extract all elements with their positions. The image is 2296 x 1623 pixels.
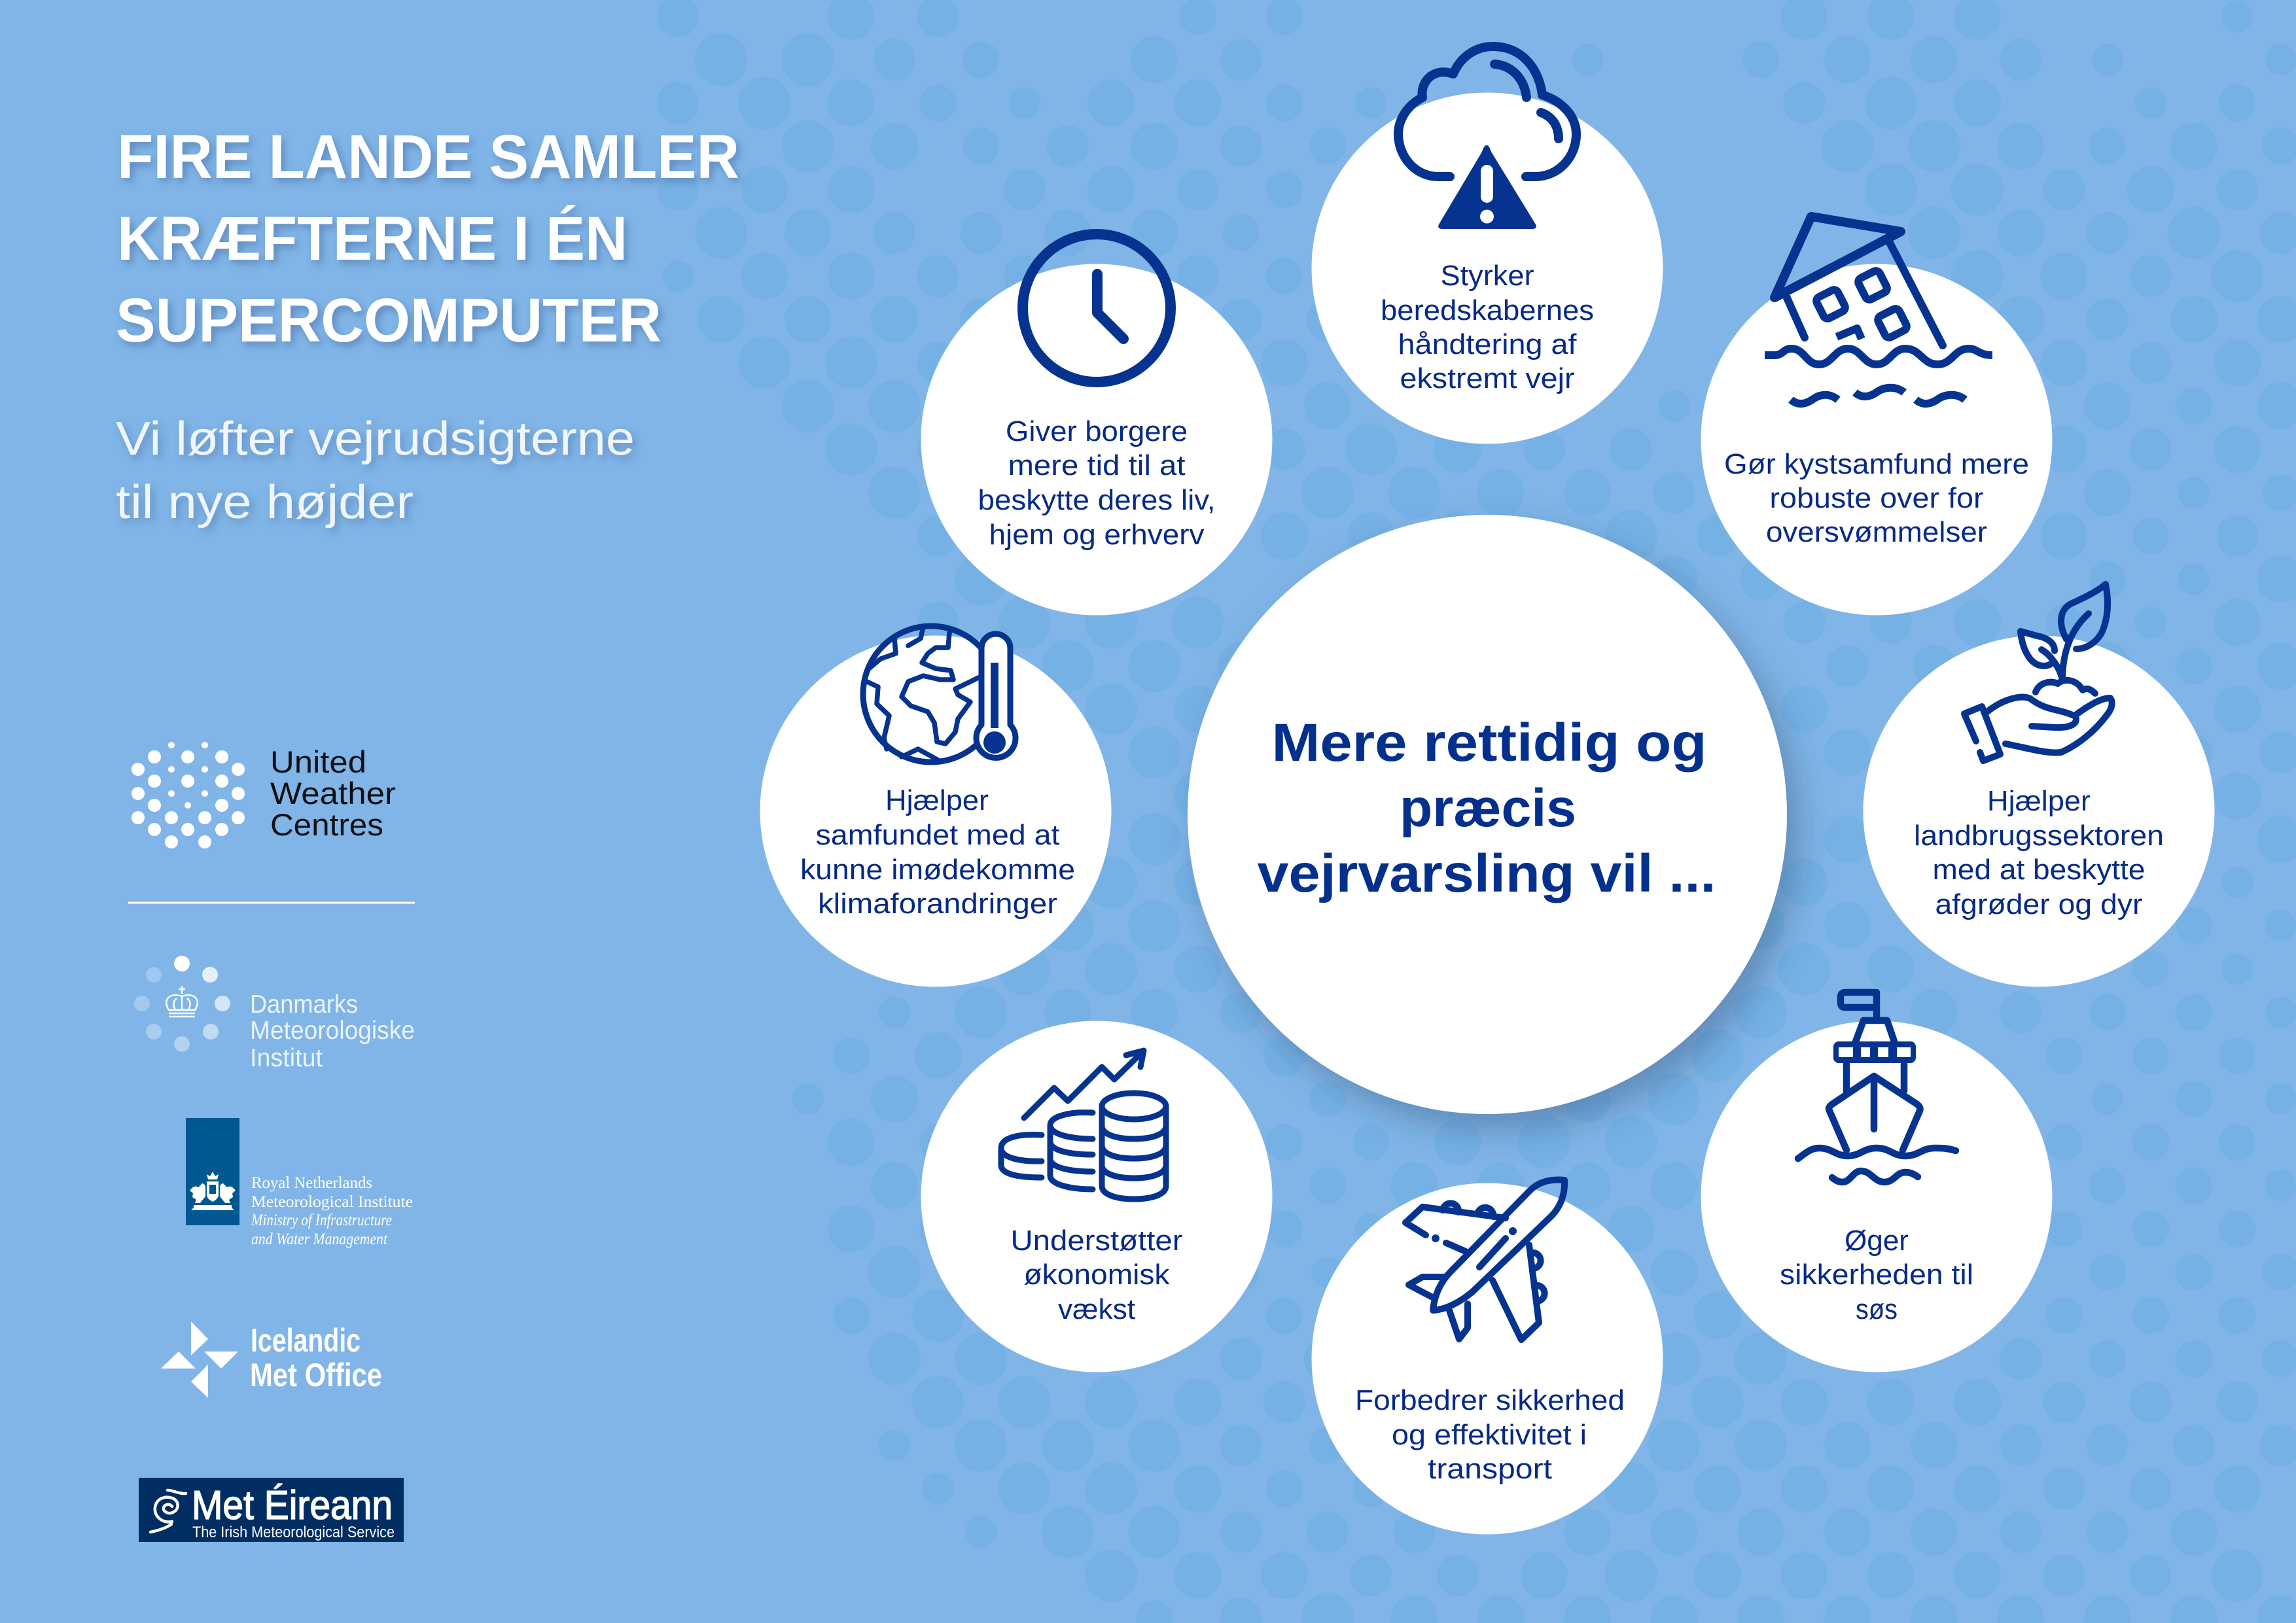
icon: clock: [1023, 234, 1171, 382]
text: ekstremt vejr: [1400, 362, 1574, 394]
text: Styrker: [1441, 260, 1534, 292]
IMO wordmark: [250, 1322, 382, 1393]
KNMI wordmark: Meteorological Institute: [251, 1193, 413, 1211]
Met Éireann wordmark: Met Éireann: [192, 1483, 393, 1528]
text: vækst: [1058, 1293, 1135, 1325]
text: Forbedrer sikkerhed: [1355, 1384, 1625, 1416]
icon: globe with thermometer: [863, 626, 1016, 762]
title: [116, 122, 739, 355]
center heading: præcis: [1400, 778, 1576, 838]
logo: Royal Netherlands Meteorological Institute: [186, 1118, 413, 1248]
DMI wordmark: Institut: [250, 1044, 323, 1072]
text: klimaforandringer: [818, 888, 1057, 920]
text: mere tid til at: [1008, 449, 1186, 481]
text: landbrugssektoren: [1914, 820, 2164, 852]
DMI wordmark: Meteorologiske: [250, 1017, 415, 1045]
panel: economic growth: [921, 1021, 1272, 1372]
panel: safety at sea: [1701, 992, 2052, 1372]
icon: plane window dots: [1432, 1227, 1517, 1242]
text: Giver borgere: [1006, 415, 1188, 447]
icon: house in flood: [1765, 217, 1992, 404]
text: hjem og erhverv: [989, 519, 1204, 551]
text: robuste over for: [1769, 482, 1984, 514]
text: Understøtter: [1010, 1225, 1183, 1257]
text: afgrøder og dyr: [1935, 888, 2142, 920]
icon: airplane: [1405, 1180, 1564, 1340]
panel: extreme weather: [1311, 46, 1663, 444]
icon: UWC dot mark: [132, 742, 245, 848]
text: og effektivitet i: [1392, 1419, 1587, 1451]
icon: DMI dots and crown: [134, 956, 230, 1052]
panel: transport: [1311, 1180, 1663, 1535]
text: [1381, 260, 1594, 394]
text: Hjælper: [885, 784, 989, 816]
KNMI wordmark: Ministry of Infrastructure: [251, 1212, 392, 1229]
text: [800, 784, 1075, 920]
title: FIRE LANDE SAMLER: [117, 122, 739, 192]
center heading: vejrvarsling vil ...: [1258, 844, 1716, 903]
panel: more time for citizens: [921, 234, 1272, 615]
background dot pattern: [678, 16, 2280, 1618]
text: håndtering af: [1398, 328, 1577, 360]
text: beredskabernes: [1381, 294, 1594, 326]
text: samfundet med at: [815, 819, 1060, 851]
icon: blue ribbon with coat of arms: [186, 1118, 239, 1225]
text: med at beskytte: [1933, 854, 2145, 886]
Met Éireann tagline: The Irish Meteorological Service: [192, 1524, 395, 1541]
text: oversvømmelser: [1766, 516, 1987, 548]
UWC wordmark: Weather: [270, 776, 396, 811]
text: [1010, 1225, 1183, 1325]
text: [1914, 785, 2164, 920]
text: [1724, 448, 2029, 548]
center heading: Mere rettidig og: [1272, 713, 1706, 773]
text: kunne imødekomme: [800, 854, 1075, 886]
panel: center circle: [1188, 515, 1787, 1114]
UWC wordmark: [270, 744, 396, 842]
panel: agriculture: [1863, 584, 2214, 986]
KNMI wordmark: and Water Management: [251, 1230, 388, 1248]
logo: Met Éireann: [139, 1478, 404, 1542]
DMI wordmark: [250, 990, 415, 1072]
icon: coin stacks with rising arrow: [1001, 1051, 1166, 1199]
KNMI wordmark: [251, 1174, 413, 1248]
text: [1355, 1384, 1625, 1485]
IMO wordmark: Met Office: [250, 1357, 382, 1393]
logo: United Weather Centres: [132, 742, 396, 848]
panel: coastal communities: [1701, 217, 2052, 615]
icon: ship on waves: [1798, 992, 1956, 1182]
text: Gør kystsamfund mere: [1724, 448, 2029, 480]
center heading: [1258, 713, 1716, 903]
icon: hand holding seedling: [1964, 584, 2112, 761]
IMO wordmark: Icelandic: [251, 1322, 361, 1359]
subtitle: Vi løfter vejrudsigterne: [116, 413, 635, 465]
icon: cloud with warning triangle: [1398, 46, 1576, 229]
text: sikkerheden til: [1780, 1259, 1973, 1291]
subtitle: til nye højder: [116, 476, 414, 529]
panel: climate change: [760, 626, 1111, 986]
UWC wordmark: Centres: [270, 807, 383, 842]
logo: Icelandic Met Office: [161, 1321, 382, 1398]
text: Hjælper: [1987, 785, 2091, 817]
subtitle: [116, 413, 635, 529]
title: KRÆFTERNE I ÉN: [117, 204, 627, 273]
text: transport: [1428, 1453, 1552, 1485]
text: [978, 415, 1216, 551]
icon: four triangles: [161, 1321, 238, 1398]
UWC wordmark: United: [270, 744, 366, 779]
text: økonomisk: [1023, 1259, 1171, 1291]
text: søs: [1856, 1293, 1898, 1325]
KNMI wordmark: Royal Netherlands: [251, 1174, 372, 1192]
icon: spiral: [150, 1490, 186, 1532]
text: beskytte deres liv,: [978, 484, 1216, 516]
DMI wordmark: Danmarks: [250, 990, 358, 1019]
text: Øger: [1845, 1225, 1909, 1257]
logo: Danmarks Meteorologiske Institut: [134, 956, 415, 1072]
text: [1780, 1225, 1973, 1325]
title: SUPERCOMPUTER: [116, 286, 662, 355]
